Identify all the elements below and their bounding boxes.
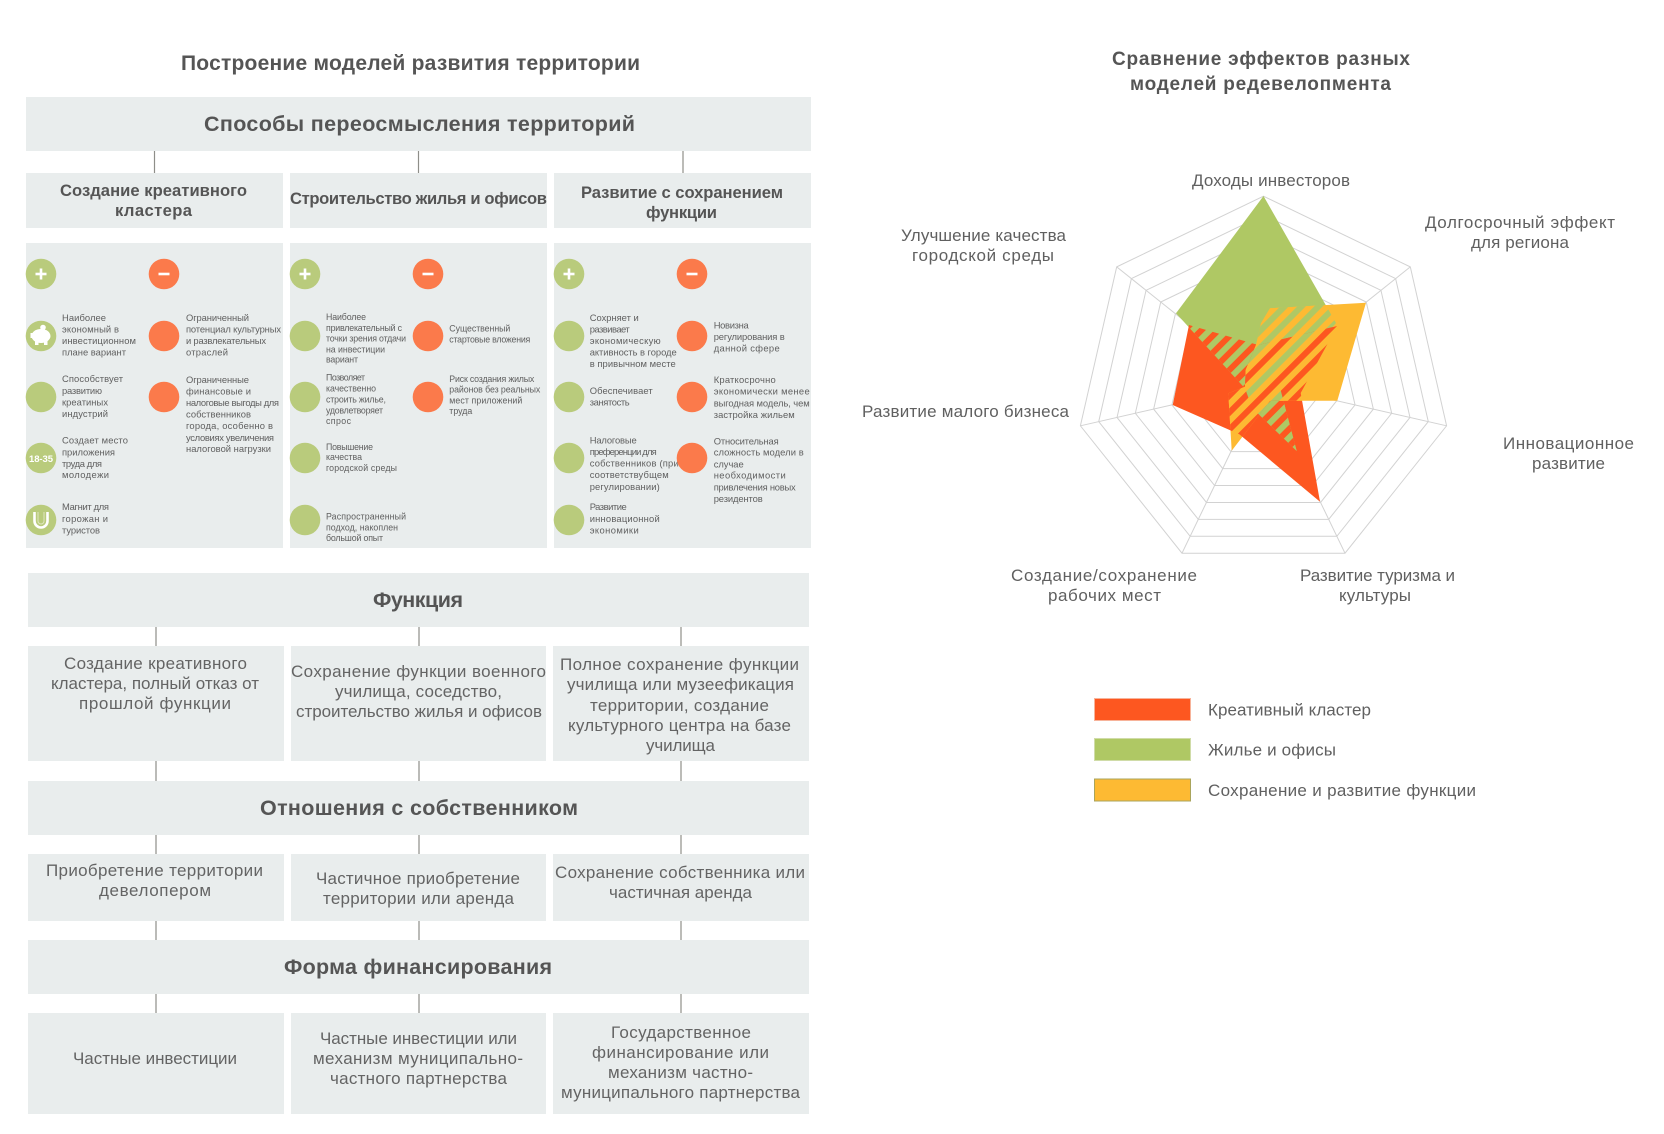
text: cons 2: Риск создания жилых <box>449 374 535 384</box>
text: pros 4: горожан и <box>62 513 108 524</box>
icons: pro bullets <box>290 321 320 535</box>
text: cons 3: случае <box>714 458 744 469</box>
connectors: financing to rows <box>156 994 681 1013</box>
text: pros 2 <box>590 385 653 408</box>
text: cons 2: города, особенно в <box>186 420 273 431</box>
card: financing state: Государственное <box>611 1023 751 1042</box>
icon: con bullet 1 <box>149 321 179 351</box>
header: ways of rethinking territories: Способы переосмысления территорий <box>204 112 635 136</box>
label: tourism: Развитие туризма и <box>1300 566 1455 585</box>
connectors: owner to rows <box>156 835 681 940</box>
card: owner partial purchase: Частичное приобретение <box>316 869 520 888</box>
icon: con bullet 2 <box>149 382 179 412</box>
text: pros 1: вариант <box>326 355 358 365</box>
text: cons 3: необходимости <box>714 470 786 481</box>
legend item: function preservation: Сохранение и развитие функции <box>1208 781 1476 800</box>
legend item: creative cluster <box>1094 698 1371 720</box>
card: financing private: Частные инвестиции <box>73 1049 237 1068</box>
text: pros 1: экономическую <box>590 335 661 346</box>
text: pros 3 <box>62 435 128 480</box>
text: cons 3 <box>714 435 804 504</box>
label: urban environment: городской среды <box>912 246 1054 265</box>
text: pros 1: Наиболее <box>62 312 106 323</box>
label: urban environment <box>901 226 1067 265</box>
text: pros 4: большой опыт <box>326 533 383 543</box>
text: pros 1 <box>326 312 406 365</box>
radar grid <box>1080 196 1447 553</box>
text: pros 1: активность в городе <box>590 347 677 358</box>
card: owner preserved <box>553 854 809 921</box>
text: pros 1: точки зрения отдачи <box>326 333 406 343</box>
overlap: all three <box>1244 327 1332 415</box>
panel: creative cluster pros and cons <box>26 243 283 548</box>
text: pros 1: инвестиционном <box>62 335 136 346</box>
text: cons 2 <box>714 374 810 420</box>
text: pros 4 <box>62 501 109 536</box>
text: cons 1: Ограниченный <box>186 312 249 323</box>
text: cons 2: налоговые выгоды для <box>186 397 279 408</box>
text: pros 4 <box>590 501 660 535</box>
text: pros 2: развитию <box>62 385 102 396</box>
card: function creative cluster: Создание креативного <box>64 654 247 673</box>
text: pros 1: плане вариант <box>62 347 127 358</box>
text: cons 1 <box>449 324 531 344</box>
text: cons 1: отраслей <box>186 347 228 358</box>
text: pros 4: экономики <box>590 524 639 535</box>
header: function <box>28 573 809 627</box>
card: function preservation: Полное сохранение функции <box>560 655 799 674</box>
label: urban environment: Улучшение качества <box>901 226 1067 245</box>
legend <box>1094 698 1476 801</box>
card: function creative cluster <box>28 646 284 761</box>
label: innovation: Инновационное <box>1503 434 1634 453</box>
column header: development with function preservation <box>554 173 811 228</box>
text: pros 3: труда для <box>62 458 102 469</box>
text: cons 2: Краткосрочно <box>714 374 776 385</box>
column header: creative cluster: кластера <box>115 201 193 220</box>
label: tourism: культуры <box>1339 586 1411 605</box>
series: function preservation <box>1228 303 1366 451</box>
card: function preservation: училища или музеефикация <box>567 675 794 694</box>
icon: con bullets <box>677 321 707 473</box>
icon: plus <box>290 259 320 289</box>
legend item: function preservation <box>1094 779 1476 801</box>
card: financing private or municipal: частного партнерства <box>330 1069 508 1088</box>
series: housing and offices <box>1176 196 1336 451</box>
text: cons 2: мест приложений <box>449 395 522 405</box>
text: pros 1 <box>62 312 136 358</box>
overlap: preservation and creative <box>1228 326 1337 437</box>
title: comparison of effects: Сравнение эффектов разных <box>1112 49 1410 70</box>
card: financing private or municipal <box>291 1013 546 1114</box>
text: pros 3: преференции для <box>590 446 657 457</box>
overlap: creative and housing <box>1188 325 1297 451</box>
text: pros 2: спрос <box>326 416 352 426</box>
card: financing state: финансирование или <box>592 1043 769 1062</box>
text: pros 1: в привычном месте <box>590 358 676 369</box>
label: long-term effect: для региона <box>1471 233 1570 252</box>
text: pros 3: молодежи <box>62 469 109 480</box>
text: pros 3: собственников (при <box>590 458 679 469</box>
text: pros 3: регулировании) <box>590 481 660 492</box>
icon: plus <box>26 259 56 289</box>
text: pros 2 <box>326 373 386 426</box>
card: function creative cluster: прошлой функции <box>79 694 231 713</box>
text: cons 1: регулирования в <box>714 331 785 342</box>
icon: plus <box>554 259 584 289</box>
text: pros 4: подход, накоплен <box>326 523 398 533</box>
text: cons 2 <box>449 374 541 416</box>
header: function: Функция <box>373 588 463 612</box>
column header: housing and offices <box>290 173 547 228</box>
icon: con bullet 2 <box>413 382 443 412</box>
text: cons 1 <box>714 319 785 354</box>
icons: pro bullets <box>554 321 584 535</box>
text: pros 1: экономный в <box>62 324 119 335</box>
connectors: header to columns <box>154 151 683 173</box>
text: cons 2: налоговой нагрузки <box>186 443 271 454</box>
card: financing private <box>28 1013 284 1114</box>
column header: development with function preservation: функции <box>646 203 717 222</box>
text: pros 2 <box>62 373 124 419</box>
text: pros 3: Налоговые <box>590 434 637 445</box>
text: cons 3: Относительная <box>714 435 779 446</box>
text: pros 2: креатиных <box>62 397 108 408</box>
text: pros 3 <box>590 434 679 492</box>
text: pros 3: приложения <box>62 447 115 458</box>
column header: creative cluster <box>26 173 283 228</box>
text: cons 1: Существенный <box>449 324 510 334</box>
card: owner preserved: Сохранение собственника или <box>555 863 805 882</box>
card: function housing and offices <box>291 646 546 761</box>
label: long-term effect <box>1425 213 1615 252</box>
text: pros 2: удовлетворяет <box>326 405 383 415</box>
header: financing form: Форма финансирования <box>284 955 552 979</box>
label: innovation: развитие <box>1532 454 1605 473</box>
icon: minus <box>149 259 179 289</box>
text: cons 2: застройка жильем <box>714 409 795 420</box>
icon: magnet <box>26 505 56 535</box>
card: function housing and offices: строительство жилья и офисов <box>296 702 542 721</box>
text: cons 2: труда <box>449 406 472 416</box>
text: pros 2: строить жилье, <box>326 395 386 405</box>
card: financing state: муниципального партнерства <box>561 1083 801 1102</box>
text: cons 1: стартовые вложения <box>449 334 531 344</box>
label: innovation <box>1503 434 1634 473</box>
text: pros 1: развивает <box>590 324 630 335</box>
card: owner developer purchase <box>28 854 284 921</box>
connectors: function to rows <box>156 627 681 781</box>
icon: age 18-35: 18-35 <box>29 454 54 465</box>
title: model building: Построение моделей развития территории <box>181 52 640 75</box>
icon: creative industries <box>26 382 56 412</box>
label: jobs <box>1011 566 1197 605</box>
text: pros 2: Способствует <box>62 373 124 384</box>
card: financing private or municipal: Частные инвестиции или <box>320 1029 517 1048</box>
text: cons 3: резидентов <box>714 493 763 504</box>
text: pros 3: соответствубщем <box>590 469 669 480</box>
text: cons 1: данной сфере <box>714 343 780 354</box>
title: comparison of effects: моделей редевелопмента <box>1130 74 1391 95</box>
card: function preservation <box>553 646 809 761</box>
text: pros 2: Позволяет <box>326 373 365 383</box>
legend item: housing and offices: Жилье и офисы <box>1208 740 1336 760</box>
column header: development with function preservation: Развитие с сохранением <box>581 183 783 202</box>
text: cons 2: собственников <box>186 409 251 420</box>
text: pros 1: на инвестиции <box>326 344 385 354</box>
text: cons 2: выгодная модель, чем <box>714 397 810 408</box>
text: pros 4: инновационной <box>590 513 660 524</box>
text: cons 2 <box>186 374 279 454</box>
card: owner partial purchase: территории или аренда <box>323 889 515 908</box>
label: jobs: Создание/сохранение <box>1011 566 1197 585</box>
text: pros 4: туристов <box>62 525 100 536</box>
card: financing state <box>553 1013 809 1114</box>
icon: age 18-35 <box>26 443 56 473</box>
text: pros 2: Обеспечивает <box>590 385 653 396</box>
header: ways of rethinking territories <box>26 97 811 151</box>
text: cons 2: районов без реальных <box>449 385 541 395</box>
text: pros 1: привлекательный с <box>326 323 403 333</box>
icon: minus <box>413 259 443 289</box>
card: owner developer purchase: Приобретение территории <box>46 861 263 880</box>
card: function preservation: училища <box>646 736 716 755</box>
text: pros 3: городской среды <box>326 463 397 473</box>
header: relations with owner: Отношения с собственником <box>260 796 578 820</box>
text: cons 1: Новизна <box>714 319 749 330</box>
overlap: preservation and housing <box>1244 305 1336 404</box>
card: function housing and offices: училища, соседство, <box>335 682 502 701</box>
text: pros 1 <box>590 312 677 369</box>
text: pros 4 <box>326 512 406 543</box>
text: pros 2: индустрий <box>62 408 108 419</box>
text: cons 1 <box>186 312 281 358</box>
text: cons 1: и развлекательных <box>186 335 266 346</box>
legend item: creative cluster: Креативный кластер <box>1208 700 1371 720</box>
text: cons 3: сложность модели в <box>714 447 804 458</box>
card: function preservation: территории, создание <box>590 696 769 715</box>
text: cons 2: экономически менее <box>714 386 810 397</box>
label: investor income: Доходы инвесторов <box>1192 171 1350 190</box>
legend item: housing and offices <box>1094 738 1336 760</box>
label: small business: Развитие малого бизнеса <box>862 402 1070 421</box>
panel: preservation pros and cons <box>554 243 811 548</box>
text: pros 3: Повышение <box>326 442 373 452</box>
text: pros 4: Развитие <box>590 501 627 512</box>
card: owner partial purchase <box>291 854 546 921</box>
card: owner preserved: частичная аренда <box>609 883 753 902</box>
text: pros 3: качества <box>326 452 362 462</box>
text: cons 2: финансовые и <box>186 386 251 397</box>
card: function housing and offices: Сохранение функции военного <box>291 662 546 681</box>
text: cons 3: привлечения новых <box>714 481 796 492</box>
label: jobs: рабочих мест <box>1048 586 1161 605</box>
series: creative cluster <box>1173 325 1337 502</box>
label: tourism <box>1300 566 1455 605</box>
text: pros 1: Сохрняет и <box>590 312 639 323</box>
card: owner developer purchase: девелопером <box>99 881 211 900</box>
text: pros 3: Создает место <box>62 435 128 446</box>
card: financing state: механизм частно- <box>608 1063 753 1082</box>
title: comparison of effects <box>1112 49 1410 95</box>
text: cons 2: условиях увеличения <box>186 432 274 443</box>
text: cons 1: потенциал культурных <box>186 324 281 335</box>
chart: radar <box>1080 196 1447 553</box>
icon: con bullet 1 <box>413 321 443 351</box>
text: pros 4: Распространенный <box>326 512 406 522</box>
column header: creative cluster: Создание креативного <box>60 181 247 200</box>
card: function creative cluster: кластера, полный отказ от <box>51 674 259 693</box>
icon: piggy bank <box>26 321 56 351</box>
column header: housing and offices: Строительство жилья и офисов <box>290 189 547 208</box>
card: function preservation: культурного центра на базе <box>568 716 791 735</box>
panel: housing and offices pros and cons <box>290 243 547 548</box>
text: pros 2: качественно <box>326 384 376 394</box>
card: financing private or municipal: механизм муниципально- <box>313 1049 523 1068</box>
text: cons 2: Ограниченные <box>186 374 249 385</box>
icon: minus <box>677 259 707 289</box>
text: pros 1: Наиболее <box>326 312 366 322</box>
text: pros 3 <box>326 442 397 473</box>
text: pros 2: занятость <box>590 397 630 408</box>
header: financing form <box>28 940 809 994</box>
header: relations with owner <box>28 781 809 835</box>
label: long-term effect: Долгосрочный эффект <box>1425 213 1615 232</box>
text: pros 4: Магнит для <box>62 501 109 512</box>
